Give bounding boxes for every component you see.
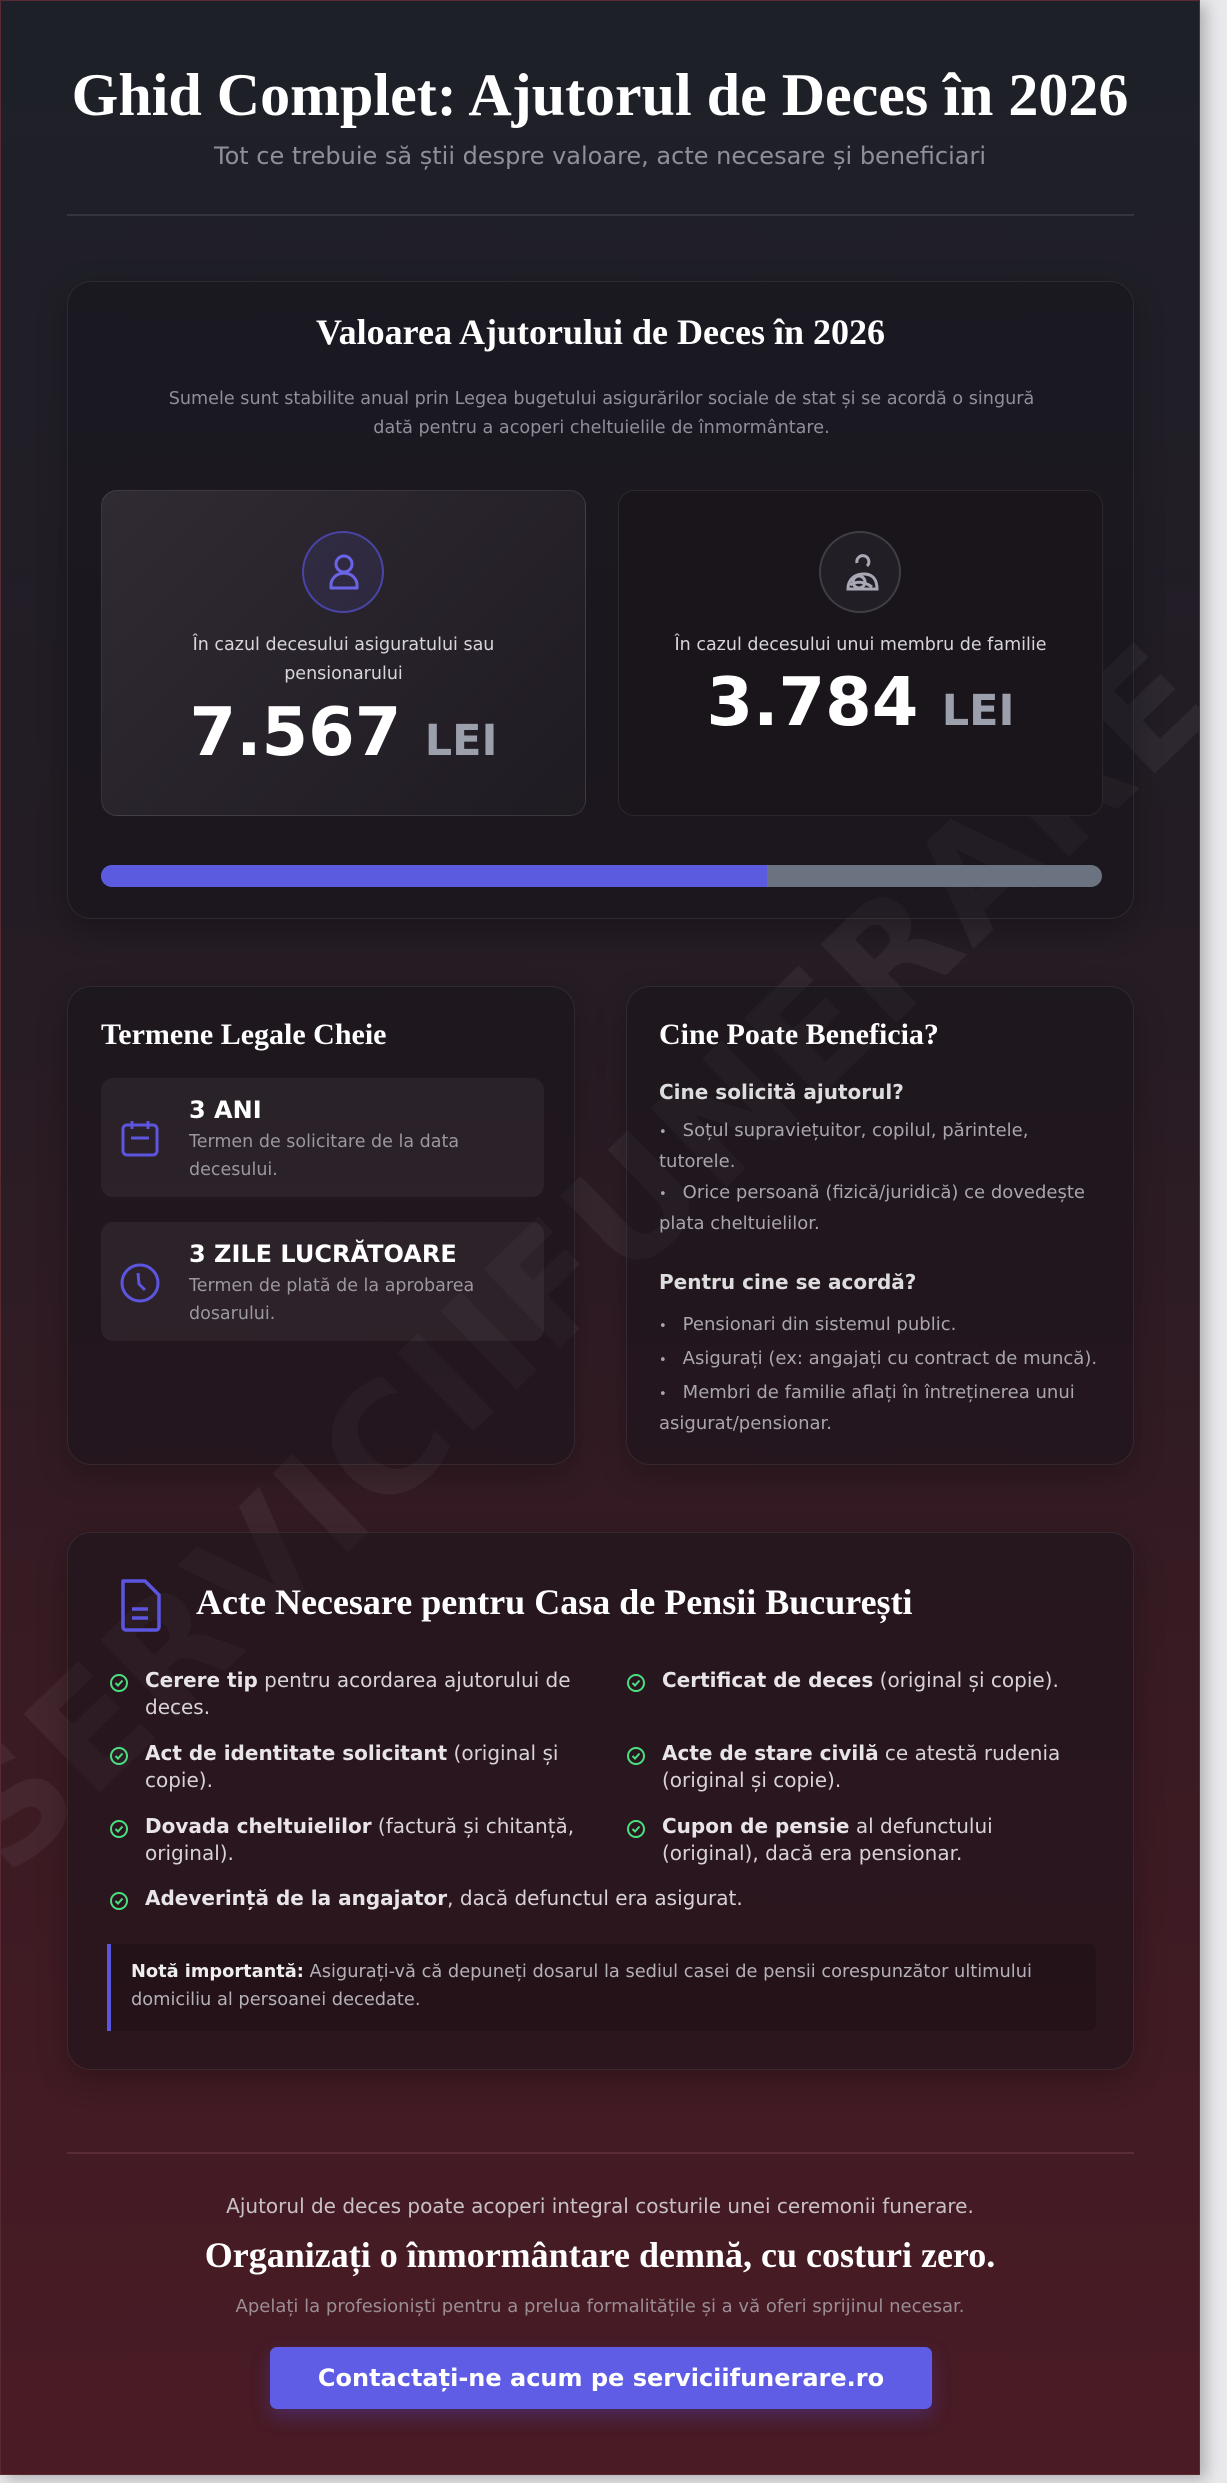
footer heading: Organizați o înmormântare demnă, cu costuri zero. — [205, 2235, 995, 2275]
button: contact — [270, 2347, 932, 2409]
subcard: familie — [618, 490, 1103, 816]
value: 3.784 LEI — [706, 663, 1015, 741]
list: documents: Act de identitate solicitant (original și copie). — [145, 1741, 558, 1792]
panel: beneficiari — [626, 986, 1134, 1465]
block: acorda: Pensionari din sistemul public. — [683, 1314, 956, 1335]
block: solicita: Orice persoană (fizică/juridică) ce dovedește plata cheltuielilor. — [659, 1182, 1085, 1234]
block: acorda: Pentru cine se acordă? — [659, 1270, 916, 1294]
button: contact: Contactați-ne acum pe serviciifunerare.ro — [318, 2364, 884, 2392]
list: documents: Adeverință de la angajator, dacă defunctul era asigurat. — [145, 1886, 743, 1910]
list: documents: Dovada cheltuielilor (factură și chitanță, original). — [145, 1814, 574, 1865]
heading: Cine Poate Beneficia? — [659, 1018, 939, 1051]
item: 3 ani — [101, 1078, 544, 1197]
description: Sumele sunt stabilite anual prin Legea bugetului asigurărilor sociale de stat și se acordă o singură dată pentru a acoperi cheltuielile de înmormântare. — [169, 389, 1034, 438]
list: documents: Cupon de pensie al defunctului (original), dacă era pensionar. — [662, 1814, 993, 1865]
value: 7.567 LEI — [189, 693, 498, 771]
icon: person — [302, 531, 384, 613]
callout: nota: Notă importantă: Asigurați-vă că depuneți dosarul la sediul casei de pensii corespunzător ultimului domiciliu al persoanei decedate. — [131, 1961, 1032, 2010]
list: documents: Certificat de deces (original și copie). — [662, 1668, 1059, 1692]
panel: valoarea — [67, 281, 1134, 919]
heading: Termene Legale Cheie — [101, 1018, 386, 1051]
item: 3 ani: Termen de solicitare de la data decesului. — [189, 1132, 459, 1180]
icon: document — [121, 1579, 161, 1632]
block: solicita — [659, 1080, 1085, 1234]
callout: nota — [107, 1944, 1096, 2031]
subtitle: Tot ce trebuie să știi despre valoare, acte necesare și beneficiari — [214, 142, 986, 170]
title: Ghid Complet: Ajutorul de Deces în 2026 — [72, 62, 1128, 128]
item: 3 ani: 3 ANI — [189, 1096, 262, 1124]
heading: Acte Necesare pentru Casa de Pensii București — [196, 1582, 913, 1622]
heading: Valoarea Ajutorului de Deces în 2026 — [316, 312, 885, 352]
list: documents — [110, 1668, 1060, 1910]
panel: acte — [67, 1532, 1134, 2070]
list: documents: Acte de stare civilă ce atestă rudenia (original și copie). — [662, 1741, 1060, 1792]
panel: termene — [67, 986, 575, 1465]
label: În cazul decesului unui membru de familie — [675, 635, 1046, 655]
block: acorda: Asigurați (ex: angajați cu contract de muncă). — [683, 1348, 1097, 1369]
footer text: Ajutorul de deces poate acoperi integral costurile unei ceremonii funerare. — [226, 2194, 974, 2218]
subcard: asigurat — [101, 490, 586, 816]
block: solicita: Soțul supraviețuitor, copilul, părintele, tutorele. — [659, 1120, 1028, 1172]
item: 3 zile: Termen de plată de la aprobarea dosarului. — [189, 1276, 474, 1324]
block: acorda — [659, 1270, 1097, 1434]
list: documents: Cerere tip pentru acordarea ajutorului de deces. — [145, 1668, 571, 1719]
block: solicita: Cine solicită ajutorul? — [659, 1080, 904, 1104]
progress bar — [101, 865, 1102, 887]
block: acorda: Membri de familie aflați în întreținerea unui asigurat/pensionar. — [659, 1382, 1075, 1434]
label: În cazul decesului asiguratului sau pensionarului — [193, 635, 494, 684]
icon: family — [819, 531, 901, 613]
footer subtext: Apelați la profesioniști pentru a prelua formalitățile și a vă oferi sprijinul necesar. — [236, 2296, 964, 2317]
item: 3 zile: 3 ZILE LUCRĂTOARE — [189, 1240, 457, 1268]
item: 3 zile — [101, 1222, 544, 1341]
